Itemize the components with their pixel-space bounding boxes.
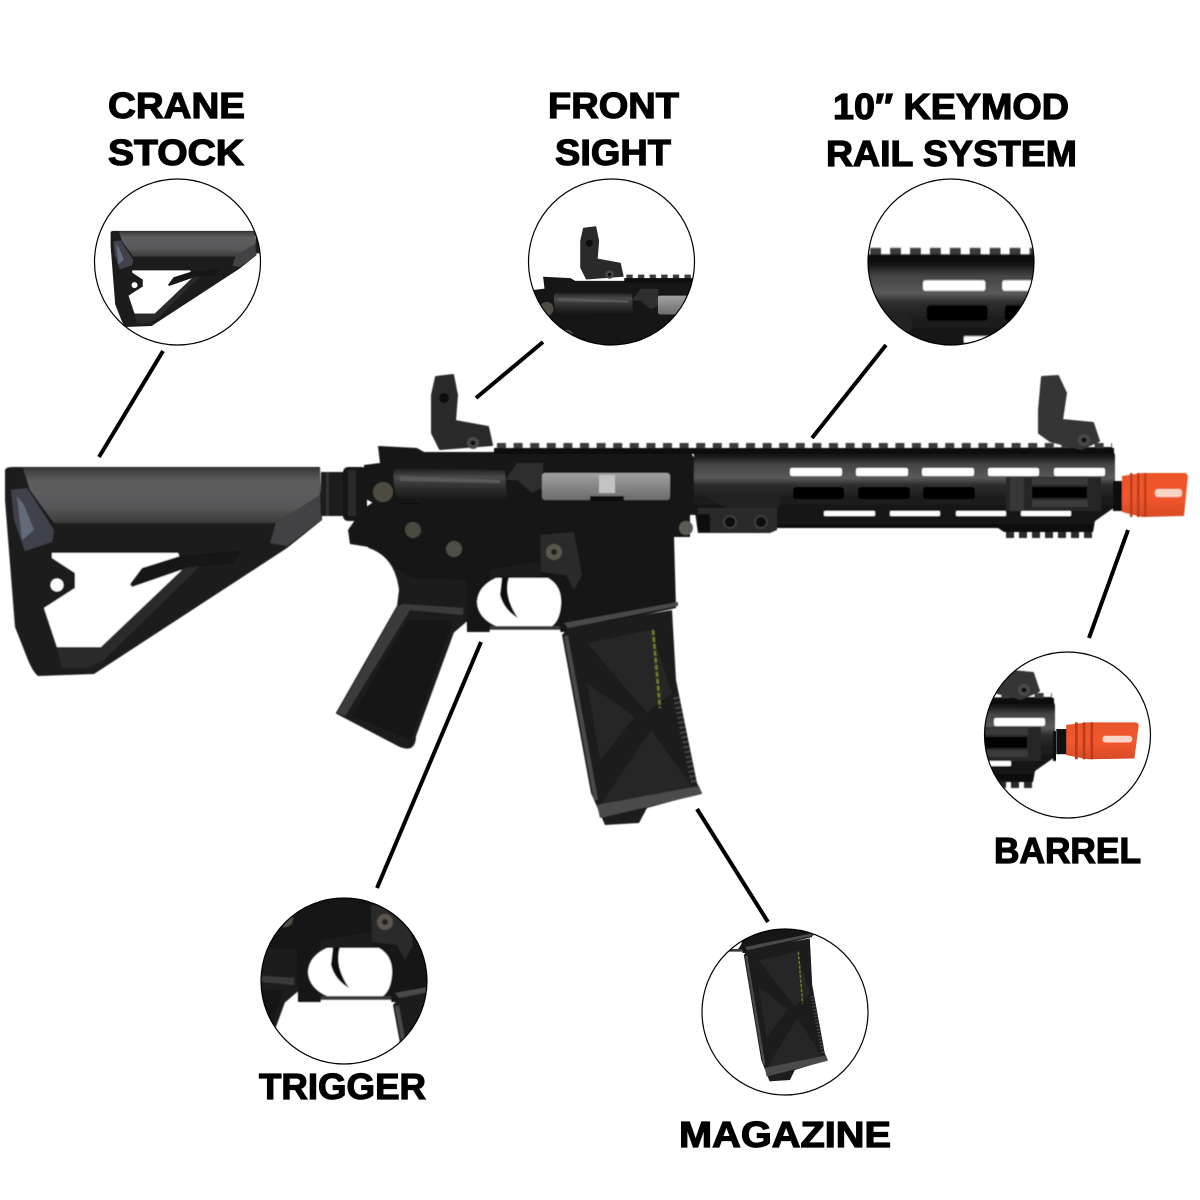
leader line: magazine (697, 809, 768, 922)
trigger (500, 577, 518, 618)
lower white slots (824, 511, 875, 516)
leader line: trigger (377, 642, 481, 888)
inset circle: barrel (984, 651, 1152, 819)
leader line: front sight (476, 342, 543, 398)
callout: crane stock (94, 92, 262, 346)
forward assist (505, 463, 543, 493)
lower receiver (348, 490, 693, 632)
rear flip sight (432, 375, 492, 449)
leader line: crane stock (99, 351, 163, 457)
callout: trigger (258, 897, 428, 1100)
stock window (44, 553, 184, 647)
buffer tube (321, 467, 367, 521)
crane stock (5, 467, 322, 676)
heading: front sight: SIGHT (555, 132, 671, 173)
heading: magazine: MAGAZINE (679, 1114, 891, 1155)
heading: trigger: TRIGGER (259, 1066, 426, 1107)
ejection port (542, 473, 670, 500)
trigger guard opening (477, 578, 561, 626)
callout: keymod rail system (828, 92, 1076, 346)
magazine (562, 602, 702, 825)
side rail block (1006, 477, 1101, 511)
heading: front sight (548, 85, 679, 173)
inset circle: trigger (260, 897, 428, 1065)
callout: magazine (681, 928, 890, 1148)
upper white slots (790, 468, 842, 476)
heading: keymod rail system (826, 86, 1077, 174)
front flip sight (1039, 376, 1099, 449)
heading: keymod rail system: 10″ KEYMOD (833, 86, 1069, 127)
inset circle: keymod rail (867, 178, 1035, 346)
middle black slots (793, 487, 844, 499)
heading: keymod rail system: RAIL SYSTEM (826, 133, 1077, 174)
upper receiver (364, 446, 696, 515)
leader line: barrel (1089, 530, 1128, 638)
inset circle: crane stock (94, 178, 262, 346)
inset circle: front sight (528, 178, 696, 346)
callout: front sight (528, 92, 696, 346)
heading: front sight: FRONT (548, 85, 679, 126)
callout: barrel (984, 651, 1152, 864)
heading: crane stock (108, 85, 245, 173)
muzzle device (1113, 473, 1188, 517)
heading: barrel: BARREL (994, 830, 1141, 871)
leader line: keymod rail (812, 345, 886, 438)
rail teeth (494, 443, 1112, 450)
heading: crane stock: STOCK (108, 132, 244, 173)
keymod handguard (494, 443, 1115, 538)
rifle (5, 375, 1188, 825)
heading: crane stock: CRANE (108, 85, 245, 126)
pistol grip (337, 547, 467, 748)
inset circle: magazine (701, 928, 869, 1096)
